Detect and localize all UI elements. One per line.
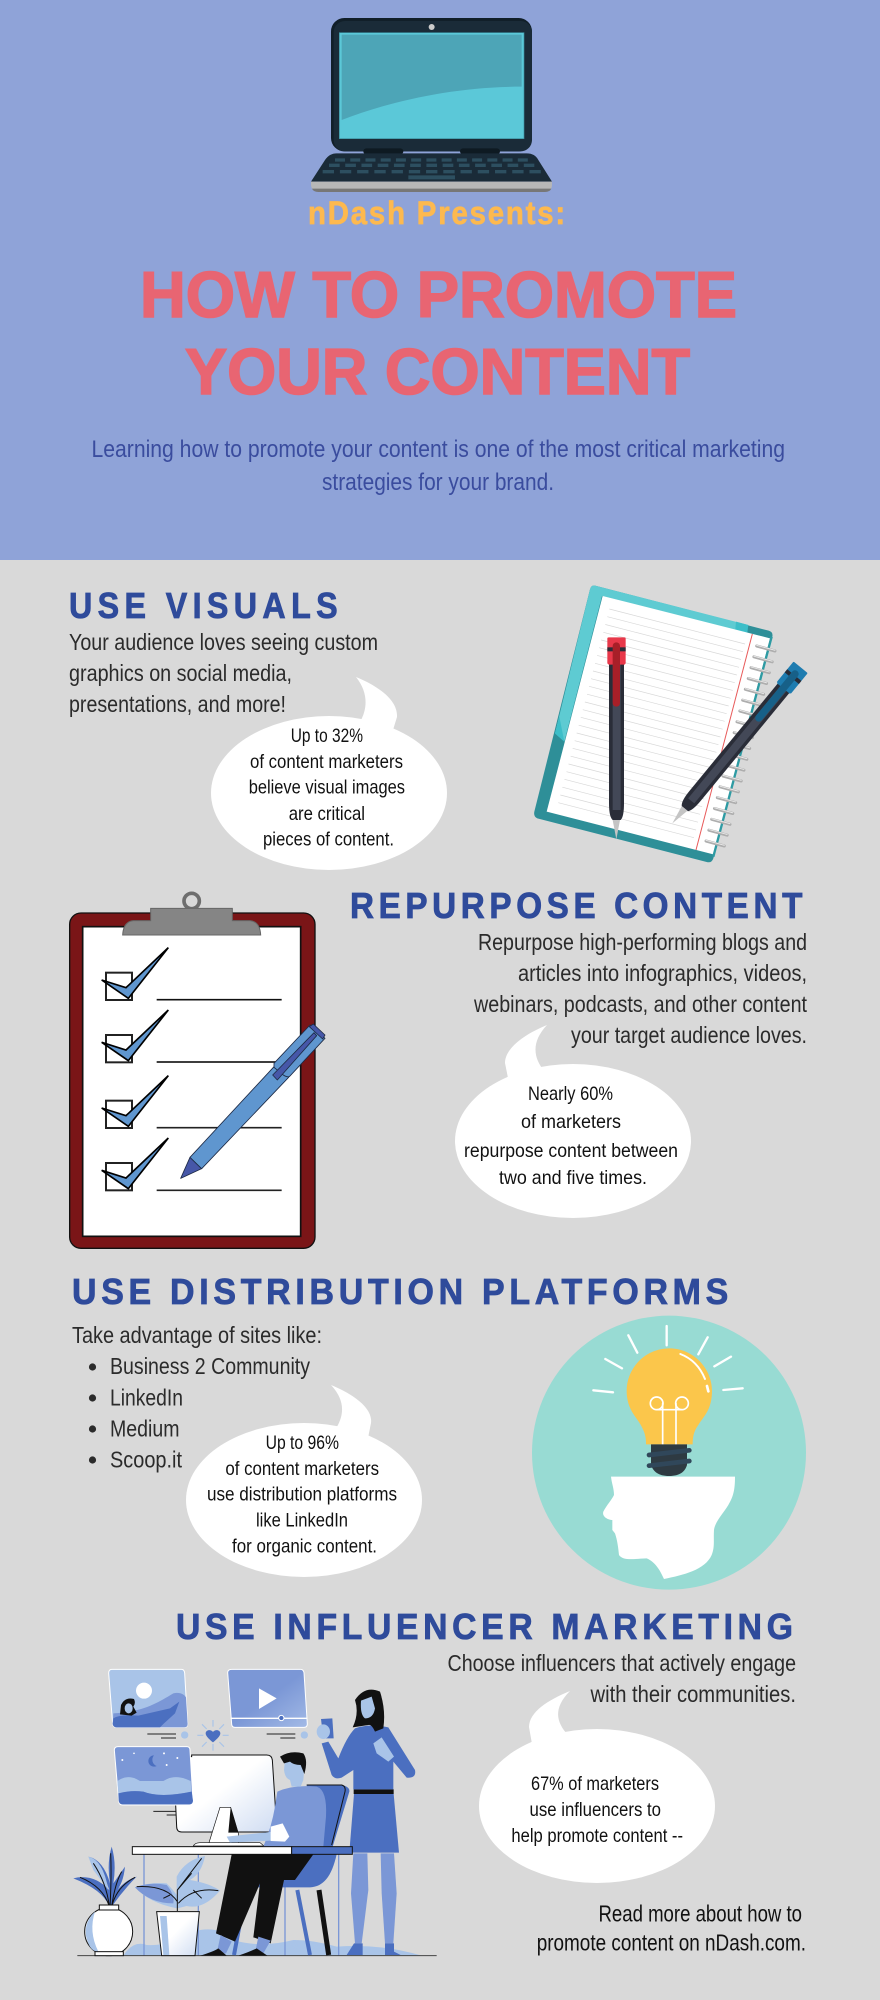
body text: graphics on social media, <box>69 660 292 686</box>
panel: header <box>0 0 880 560</box>
intro text: strategies for your brand. <box>322 469 554 496</box>
ground mounds <box>123 1929 422 1956</box>
icon: blue pen on clipboard <box>181 1024 325 1178</box>
intro text <box>92 436 785 496</box>
callout: 32 percent: are critical <box>289 803 365 825</box>
callout: 96 percent: for organic content. <box>232 1536 377 1558</box>
callout: 32 percent: believe visual images <box>249 776 405 798</box>
panel: use influencer marketing <box>73 1606 806 1956</box>
body text: with their communities. <box>590 1681 796 1707</box>
icon: light bulb over head <box>532 1316 806 1590</box>
list of sites: Scoop.it <box>110 1446 183 1472</box>
media card: night landscape <box>114 1747 193 1805</box>
checklist row 2 <box>102 1010 282 1062</box>
body text: Take advantage of sites like: <box>72 1322 322 1348</box>
plant in pot <box>135 1856 220 1956</box>
callout: 60 percent <box>455 1025 691 1218</box>
checklist row 1 <box>102 948 282 1000</box>
title: HOW TO PROMOTE <box>140 258 737 331</box>
body text: articles into infographics, videos, <box>518 960 807 986</box>
title: YOUR CONTENT <box>185 335 690 408</box>
panel: use distribution platforms <box>72 1271 806 1590</box>
callout: 60 percent: repurpose content between <box>464 1140 678 1162</box>
list of sites: Medium <box>110 1416 180 1442</box>
callout: 96 percent: Up to 96% <box>266 1432 339 1454</box>
callout: 67 percent: 67% of marketers <box>531 1773 659 1795</box>
man <box>200 1752 326 1956</box>
media card: video player <box>228 1669 307 1727</box>
panel: repurpose content <box>70 885 808 1248</box>
body text: Repurpose high-performing blogs and <box>478 929 807 955</box>
callout: 32 percent: of content marketers <box>250 751 403 773</box>
callout: 32 percent: pieces of content. <box>263 828 394 850</box>
panel: use visuals <box>69 585 808 870</box>
subtitle: nDash Presents: nDash Presents: <box>308 195 567 231</box>
body text: webinars, podcasts, and other content <box>473 991 808 1017</box>
desk <box>132 1847 352 1854</box>
illustration: people at desk with media cards <box>73 1669 437 1956</box>
body text: presentations, and more! <box>69 691 286 717</box>
heading: USE DISTRIBUTION PLATFORMS <box>72 1271 733 1312</box>
callout: 32 percent <box>211 677 447 870</box>
body text: your target audience loves. <box>571 1022 807 1048</box>
list of sites: Business 2 Community <box>110 1353 310 1379</box>
title <box>140 258 737 408</box>
list of sites <box>89 1353 310 1472</box>
icon: notebook and pens <box>534 585 808 862</box>
callout: 96 percent <box>186 1385 422 1577</box>
heading: USE VISUALS <box>69 585 343 626</box>
captions and dots <box>147 1731 308 1816</box>
plant in round vase <box>73 1847 137 1956</box>
body text <box>448 1650 796 1707</box>
heading: REPURPOSE CONTENT <box>350 885 807 926</box>
chair <box>234 1785 349 1955</box>
closing note: Read more about how to <box>598 1901 802 1927</box>
list of sites: LinkedIn <box>110 1384 183 1410</box>
callout: 32 percent: Up to 32% <box>291 725 363 747</box>
callout: 67 percent <box>479 1691 715 1883</box>
intro text: Learning how to promote your content is one of the most critical marketing <box>92 436 785 463</box>
checklist row 3 <box>102 1076 282 1128</box>
callout: 96 percent: use distribution platforms <box>207 1484 397 1506</box>
monitor <box>176 1755 277 1846</box>
icon: laptop <box>311 18 552 192</box>
callout: 60 percent: Nearly 60% <box>528 1083 613 1105</box>
callout: 96 percent: of content marketers <box>225 1458 379 1480</box>
woman <box>317 1690 415 1955</box>
callout: 67 percent: use influencers to <box>530 1799 661 1821</box>
body text: Choose influencers that actively engage <box>448 1650 796 1676</box>
icon: blue pen <box>665 662 808 829</box>
checklist row 4 <box>102 1138 282 1190</box>
closing note: promote content on nDash.com. <box>537 1930 806 1956</box>
body text <box>473 929 808 1048</box>
body text <box>69 629 378 717</box>
media card: person waving <box>109 1669 188 1727</box>
icon: heart <box>197 1720 229 1751</box>
heading: USE INFLUENCER MARKETING <box>176 1606 798 1647</box>
icon: red pen <box>607 637 626 839</box>
callout: 67 percent: help promote content -- <box>511 1825 683 1847</box>
closing note <box>537 1901 806 1956</box>
callout: 96 percent: like LinkedIn <box>256 1510 348 1532</box>
callout: 60 percent: two and five times. <box>499 1167 647 1189</box>
callout: 60 percent: of marketers <box>521 1111 621 1133</box>
body text: Your audience loves seeing custom <box>69 629 378 655</box>
icon: clipboard with checklist <box>70 893 325 1248</box>
